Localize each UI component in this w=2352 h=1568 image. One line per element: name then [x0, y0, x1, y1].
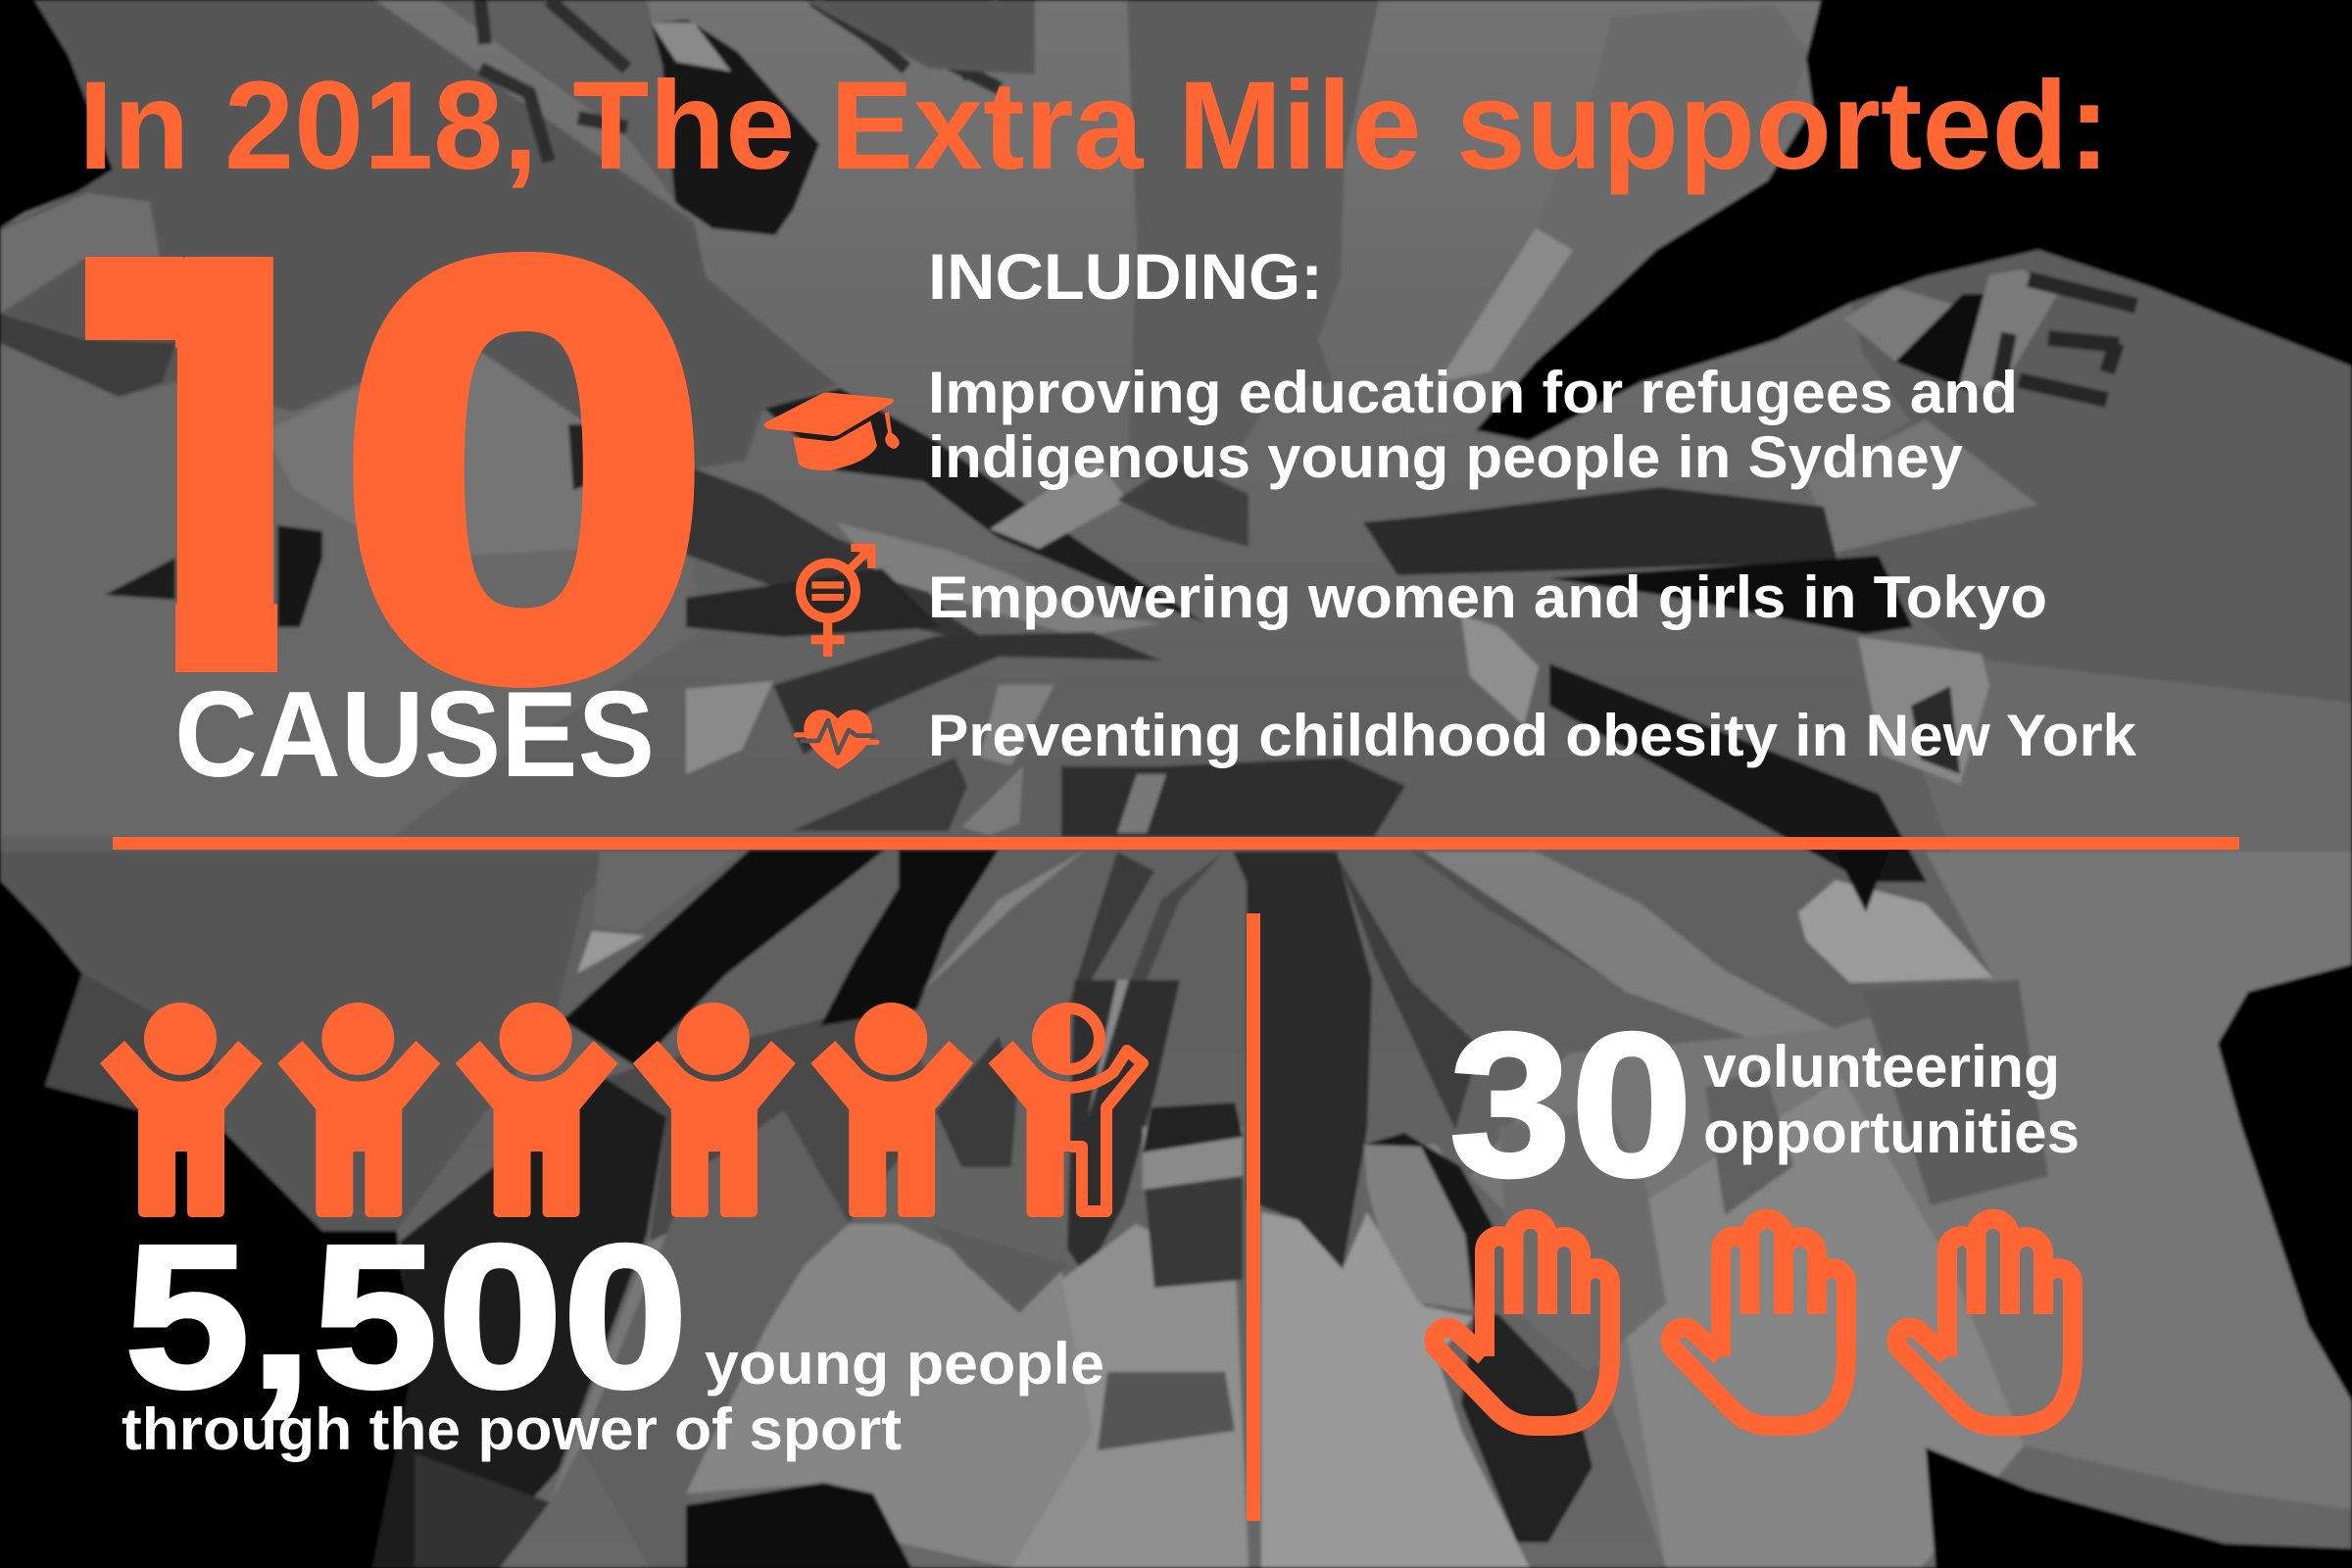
young people: young people [705, 1331, 1104, 1396]
icon: person 3 [456, 1003, 618, 1217]
education text [928, 360, 2018, 490]
icon: person 5 [810, 1003, 973, 1217]
5,500 stat [122, 1203, 1104, 1462]
opportunities: opportunities [1703, 1100, 2080, 1165]
icon: raised hand 1 [1435, 1219, 1610, 1426]
icon: person 2 [277, 1003, 440, 1217]
number 5,500: 5,500 [124, 1203, 688, 1431]
number 30: 30 [1449, 992, 1692, 1219]
icon: heart with pulse [797, 710, 877, 769]
numeral 10: 0 [335, 137, 713, 801]
volunteering: volunteering [1703, 1034, 2060, 1100]
through the power of sport: through the power of sport [122, 1396, 902, 1462]
icon: gender equality [801, 546, 873, 657]
vertical divider [1247, 913, 1260, 1521]
including heading: INCLUDING: [928, 240, 1323, 313]
people pictogram row [100, 1003, 1151, 1217]
obesity text: Preventing childhood obesity in New York [928, 703, 2137, 768]
causes label: CAUSES [174, 667, 655, 803]
icon: raised hand 2 [1671, 1219, 1846, 1426]
numeral 10: 1 [48, 135, 374, 799]
empowerment text: Empowering women and girls in Tokyo [928, 564, 2047, 630]
icon: person 4 [633, 1003, 796, 1217]
numeral 10 [85, 251, 695, 688]
icon: person 1 [100, 1003, 263, 1217]
education line 1: Improving education for refugees and [928, 360, 2018, 425]
icon: raised hand 3 [1897, 1219, 2073, 1426]
big number 10 causes [85, 251, 695, 777]
30 stat [1449, 992, 2080, 1219]
title: In 2018, The Extra Mile supported: [78, 56, 2110, 196]
icon: half-filled person 6 [988, 1003, 1151, 1217]
education line 2: indigenous young people in Sydney [928, 424, 1964, 490]
icon: graduation cap [764, 392, 900, 470]
horizontal divider [113, 837, 2239, 850]
